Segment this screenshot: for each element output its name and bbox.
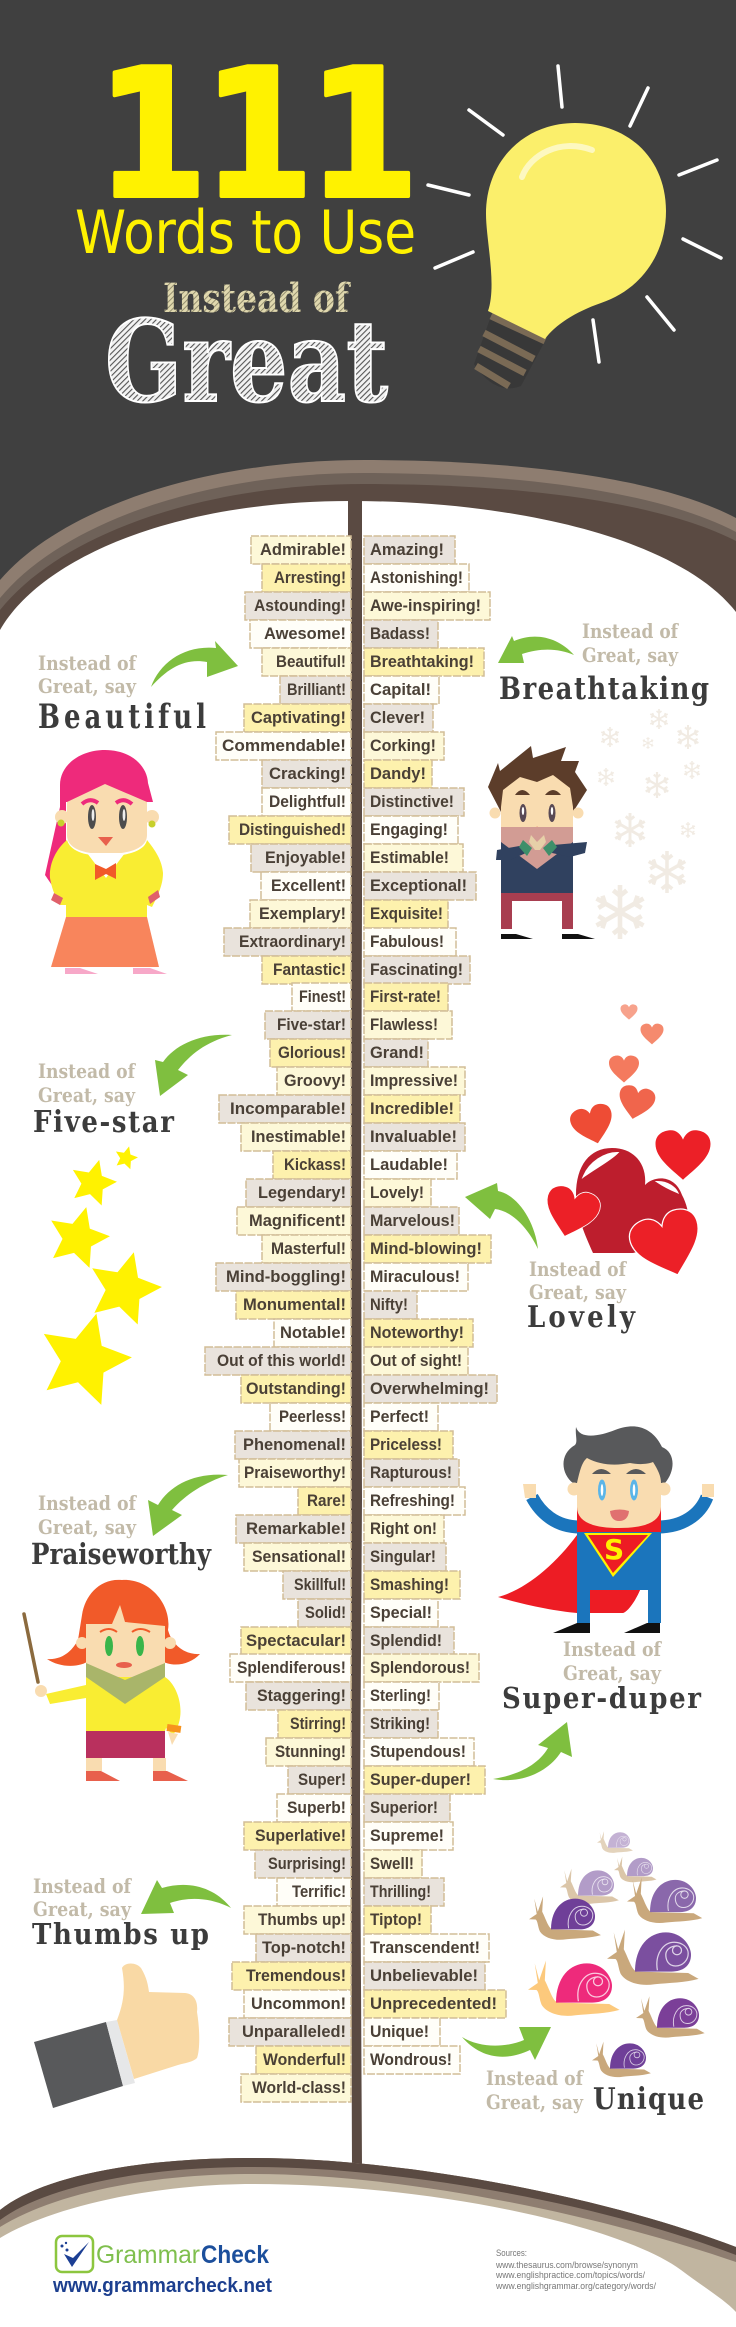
tag: Special: Special!	[370, 1604, 432, 1622]
word column: left	[205, 536, 351, 2102]
title: Great: Great	[105, 297, 388, 428]
tag: Skillful: Skillful!	[294, 1576, 346, 1594]
tag: Flawless: Flawless!	[370, 1016, 438, 1034]
logo: GrammarCheck: www.grammarcheck.net	[52, 2275, 272, 2297]
tag: Tiptop: Tiptop!	[370, 1911, 422, 1929]
tag: First-rate: First-rate!	[370, 988, 441, 1006]
callout: Thumbs up: Thumbs up	[32, 1918, 209, 1951]
tag: Excellent: Excellent!	[271, 877, 346, 895]
tag: Sterling: Sterling!	[370, 1687, 431, 1705]
tag: Stupendous	[364, 1738, 474, 1766]
tag: Estimable: Estimable!	[370, 849, 449, 867]
tag: Phenomenal	[235, 1431, 351, 1459]
tag: Lovely	[364, 1179, 431, 1207]
tag: Thrilling	[364, 1878, 444, 1906]
tag: Wonderful	[256, 2046, 351, 2074]
tag: Surprising: Surprising!	[268, 1855, 346, 1873]
tag: Estimable	[364, 844, 463, 872]
tag: Transcendent	[364, 1934, 489, 1962]
tag: Astonishing: Astonishing!	[370, 569, 463, 587]
tag: Distinguished: Distinguished!	[239, 821, 346, 839]
tag: Super: Super!	[298, 1771, 346, 1789]
tag: Unbelievable	[364, 1962, 485, 1990]
tag: Thrilling: Thrilling!	[370, 1883, 431, 1901]
callout: Breathtaking: Instead of	[582, 620, 679, 643]
tag: Mind-blowing: Mind-blowing!	[370, 1240, 482, 1258]
tag: Awe-inspiring: Awe-inspiring!	[370, 597, 481, 615]
tag: Beautiful	[262, 648, 351, 676]
tag: Out of this world: Out of this world!	[217, 1352, 346, 1370]
tag: Magnificent	[237, 1207, 351, 1235]
tag: Fascinating: Fascinating!	[370, 961, 463, 979]
callout: Super-duper: Super-duper	[502, 1682, 702, 1715]
callout: Super-duper: Instead of	[563, 1638, 662, 1661]
tag: Stunning: Stunning!	[275, 1743, 346, 1761]
tag: Admirable: Admirable!	[260, 541, 346, 559]
tag: Unbelievable: Unbelievable!	[370, 1967, 478, 1985]
logo: GrammarCheck	[52, 2236, 272, 2297]
text block: sources: www.englishgrammar.org/category/words/	[495, 2281, 656, 2292]
tag: Sensational	[244, 1543, 351, 1571]
callout: Praiseworthy: Great, say	[38, 1516, 137, 1539]
icon: snowflakes	[597, 709, 700, 939]
tag: Arresting: Arresting!	[274, 569, 346, 587]
tag: Astounding	[245, 592, 351, 620]
tag: Refreshing: Refreshing!	[370, 1492, 455, 1510]
callout: Thumbs up: Great, say	[33, 1898, 132, 1921]
tag: Peerless: Peerless!	[279, 1408, 346, 1426]
callout: Super-duper	[502, 1638, 702, 1715]
character: girl with pink hair	[45, 750, 167, 974]
tag: Legendary: Legendary!	[258, 1184, 346, 1202]
arrow: Five-star	[155, 1035, 232, 1096]
tag: Legendary	[246, 1179, 351, 1207]
callout: Praiseworthy: Instead of	[38, 1492, 137, 1515]
tag: Impressive	[364, 1067, 465, 1095]
callout: Thumbs up: Instead of	[33, 1875, 132, 1898]
tag: Magnificent: Magnificent!	[249, 1212, 346, 1230]
tag: Nifty: Nifty!	[370, 1296, 408, 1314]
tag: Laudable	[364, 1151, 457, 1179]
tag: Invaluable	[364, 1123, 465, 1151]
callout: Beautiful: Beautiful	[38, 698, 206, 737]
tag: Rapturous	[364, 1459, 459, 1487]
tag: Overwhelming	[364, 1375, 497, 1403]
tag: Lovely: Lovely!	[370, 1184, 424, 1202]
tag: Outstanding	[241, 1375, 351, 1403]
tag: Exquisite	[364, 900, 448, 928]
tag: Smashing	[364, 1571, 460, 1599]
callout: Beautiful: Great, say	[38, 675, 137, 698]
tag: Enjoyable: Enjoyable!	[265, 849, 346, 867]
tag: Singular: Singular!	[370, 1548, 436, 1566]
tag: Uncommon: Uncommon!	[251, 1995, 346, 2013]
tag: Dandy	[364, 760, 432, 788]
tag: Priceless	[364, 1431, 453, 1459]
tag: Staggering: Staggering!	[257, 1687, 346, 1705]
tag: Noteworthy: Noteworthy!	[370, 1324, 464, 1342]
tag: Splendiferous: Splendiferous!	[237, 1659, 346, 1677]
tag: Wonderful: Wonderful!	[263, 2051, 346, 2069]
callout: Lovely: Great, say	[529, 1281, 627, 1304]
callout: Praiseworthy	[31, 1492, 212, 1571]
tag: Unprecedented	[364, 1990, 506, 2018]
tag: Groovy: Groovy!	[284, 1072, 346, 1090]
tag: Admirable	[251, 536, 351, 564]
tag: Flawless	[364, 1011, 452, 1039]
tag: Stunning	[266, 1738, 351, 1766]
callout: Thumbs up	[32, 1875, 209, 1951]
tag: Nifty	[364, 1291, 417, 1319]
tag: Astonishing	[364, 564, 469, 592]
arrow: Unique	[462, 2027, 551, 2060]
tag: Solid	[298, 1599, 351, 1627]
logo: GrammarCheck: Check	[201, 2241, 269, 2269]
tag: Finest	[292, 983, 351, 1011]
tag: Mind-boggling: Mind-boggling!	[226, 1268, 346, 1286]
tag: Arresting	[262, 564, 351, 592]
title: Words to Use: Words to Use	[75, 198, 416, 268]
callout: Five-star: Instead of	[38, 1060, 136, 1083]
tag: Badass	[364, 620, 438, 648]
tag: Phenomenal: Phenomenal!	[243, 1436, 346, 1454]
tag: Priceless: Priceless!	[370, 1436, 442, 1454]
tag: Finest: Finest!	[299, 988, 346, 1006]
tag: Commendable	[216, 732, 351, 760]
tag: Transcendent: Transcendent!	[370, 1939, 480, 1957]
tag: Unparalleled: Unparalleled!	[242, 2023, 346, 2041]
tag: Five-star	[265, 1011, 351, 1039]
tag: Glorious: Glorious!	[278, 1044, 346, 1062]
tag: Out of sight	[364, 1347, 468, 1375]
tag: First-rate	[364, 983, 448, 1011]
tag: Top-notch: Top-notch!	[262, 1939, 346, 1957]
tag: Fascinating	[364, 956, 470, 984]
tag: Rapturous: Rapturous!	[370, 1464, 452, 1482]
tag: Spectacular	[241, 1627, 351, 1655]
tag: Mind-blowing	[364, 1235, 491, 1263]
tag: Superior	[364, 1794, 450, 1822]
tag: Superior: Superior!	[370, 1799, 438, 1817]
tag: Special	[364, 1599, 438, 1627]
tag: Corking: Corking!	[370, 737, 436, 755]
tag: Super	[288, 1766, 351, 1794]
callout: Praiseworthy: Praiseworthy	[31, 1537, 212, 1571]
tag: Superb: Superb!	[287, 1799, 346, 1817]
tag: Unprecedented: Unprecedented!	[370, 1995, 497, 2013]
tag: Swell: Swell!	[370, 1855, 414, 1873]
text block: sources: Sources:	[496, 2248, 527, 2259]
tag: Splendorous	[364, 1654, 479, 1682]
tag: Five-star: Five-star!	[277, 1016, 346, 1034]
tag: Capital: Capital!	[370, 681, 431, 699]
tag: Inestimable: Inestimable!	[251, 1128, 346, 1146]
tag: Thumbs up	[244, 1906, 351, 1934]
tag: Breathtaking	[364, 648, 484, 676]
trunk divider	[348, 490, 362, 2168]
tag: Terrific	[277, 1878, 351, 1906]
tag: Stirring: Stirring!	[290, 1715, 346, 1733]
tag: Super-duper: Super-duper!	[370, 1771, 471, 1789]
tag: Exceptional	[364, 872, 476, 900]
tag: Rare	[298, 1487, 351, 1515]
tag: Right on: Right on!	[370, 1520, 437, 1538]
tag: Excellent	[261, 872, 351, 900]
tag: Notable: Notable!	[280, 1324, 346, 1342]
tag: Supreme: Supreme!	[370, 1827, 444, 1845]
tag: Swell	[364, 1850, 422, 1878]
tag: Unparalleled	[229, 2018, 351, 2046]
tag: Remarkable	[236, 1515, 351, 1543]
tag: Captivating	[244, 704, 351, 732]
title: 111: 111	[96, 31, 419, 238]
tag: Fantastic	[262, 956, 351, 984]
callout: Super-duper: Great, say	[563, 1662, 662, 1685]
tag: Impressive: Impressive!	[370, 1072, 458, 1090]
tag: Incomparable	[219, 1095, 351, 1123]
tag: Clever	[364, 704, 433, 732]
tag: Groovy	[277, 1067, 351, 1095]
tag: Miraculous	[364, 1263, 468, 1291]
tag: Superb	[277, 1794, 351, 1822]
tag: Exemplary	[250, 900, 351, 928]
callout: Unique: Unique	[593, 2081, 704, 2116]
callout: Beautiful	[38, 652, 206, 737]
callout: Lovely: Lovely	[527, 1299, 636, 1334]
panel: bottom ground arc	[0, 2158, 736, 2312]
arrow: Breathtaking	[498, 636, 574, 663]
tag: Masterful: Masterful!	[271, 1240, 346, 1258]
tag: Tiptop	[364, 1906, 431, 1934]
icon: stars	[30, 1143, 169, 1409]
tag: Perfect: Perfect!	[370, 1408, 429, 1426]
tag: Peerless	[270, 1403, 351, 1431]
tag: Noteworthy	[364, 1319, 473, 1347]
tag: Corking	[364, 732, 444, 760]
tag: Fantastic: Fantastic!	[273, 961, 346, 979]
tag: Sensational: Sensational!	[252, 1548, 346, 1566]
tag: Superlative	[244, 1822, 351, 1850]
arrow: Praiseworthy	[148, 1475, 228, 1536]
tag: Monumental: Monumental!	[243, 1296, 346, 1314]
tag: Superlative: Superlative!	[255, 1827, 346, 1845]
tag: Amazing: Amazing!	[370, 541, 444, 559]
tag: Unique	[364, 2018, 440, 2046]
tag: Beautiful: Beautiful!	[276, 653, 346, 671]
panel: white content area	[0, 501, 736, 2327]
tag: Tremendous	[232, 1962, 351, 1990]
tag: Splendid: Splendid!	[370, 1632, 442, 1650]
tag: Top-notch	[256, 1934, 351, 1962]
tag: Splendid	[364, 1627, 454, 1655]
tag: Engaging: Engaging!	[370, 821, 448, 839]
tag: Outstanding: Outstanding!	[246, 1380, 346, 1398]
tag: Fabulous: Fabulous!	[370, 933, 444, 951]
callout: Lovely: Instead of	[529, 1258, 627, 1281]
logo: GrammarCheck: Grammar	[96, 2241, 200, 2269]
icon: hearts	[539, 1004, 711, 1286]
tag: Cracking	[262, 760, 351, 788]
tag: Praiseworthy: Praiseworthy!	[244, 1464, 346, 1482]
arrow: Thumbs up	[141, 1880, 231, 1914]
tag: Laudable: Laudable!	[370, 1156, 448, 1174]
tag: Delightful	[262, 788, 351, 816]
tag: Inestimable	[241, 1123, 351, 1151]
tag: Spectacular: Spectacular!	[246, 1632, 346, 1650]
tag: Grand	[364, 1039, 428, 1067]
tag: Skillful	[283, 1571, 351, 1599]
tag: Brilliant: Brilliant!	[287, 681, 346, 699]
tag: Astounding: Astounding!	[254, 597, 346, 615]
tag: Notable	[274, 1319, 351, 1347]
tag: Grand: Grand!	[370, 1044, 424, 1062]
tag: Staggering	[246, 1682, 351, 1710]
tag: Out of this world	[205, 1347, 351, 1375]
text block: sources: www.englishpractice.com/topics/words/	[495, 2270, 645, 2281]
tag: Awe-inspiring	[364, 592, 490, 620]
tag: Distinctive: Distinctive!	[370, 793, 454, 811]
tag: Stirring	[278, 1710, 351, 1738]
tag: Striking	[364, 1710, 438, 1738]
tag: Surprising	[255, 1850, 351, 1878]
tag: Striking: Striking!	[370, 1715, 430, 1733]
callout: Unique: Great, say	[486, 2091, 584, 2114]
tag: Unique: Unique!	[370, 2023, 429, 2041]
callout: Breathtaking: Great, say	[582, 644, 679, 667]
tag: Invaluable: Invaluable!	[370, 1128, 457, 1146]
tag: Engaging	[364, 816, 458, 844]
tag: Stupendous: Stupendous!	[370, 1743, 466, 1761]
tag: Awesome: Awesome!	[264, 625, 346, 643]
tag: Capital	[364, 676, 439, 704]
character: teacher with pointer	[24, 1580, 200, 1781]
callout: Unique	[486, 2067, 704, 2116]
character: superhero	[498, 1426, 714, 1633]
tag: Dandy: Dandy!	[370, 765, 426, 783]
arrow: Super-duper	[493, 1722, 572, 1780]
panel: arch top band	[0, 460, 736, 700]
tag: Cracking: Cracking!	[269, 765, 346, 783]
tag: Tremendous: Tremendous!	[246, 1967, 346, 1985]
tag: Singular	[364, 1543, 446, 1571]
tag: Clever: Clever!	[370, 709, 425, 727]
tag: Marvelous	[364, 1207, 459, 1235]
icon: snails	[528, 1831, 705, 2077]
tag: Uncommon	[244, 1990, 351, 2018]
tag: Amazing	[364, 536, 455, 564]
tag: Overwhelming: Overwhelming!	[370, 1380, 489, 1398]
callout: Unique: Instead of	[486, 2067, 584, 2090]
arrow: Lovely	[465, 1183, 538, 1249]
tag: Brilliant	[280, 676, 351, 704]
tag: Extraordinary: Extraordinary!	[239, 933, 346, 951]
tag: Captivating: Captivating!	[251, 709, 346, 727]
tag: Incredible: Incredible!	[370, 1100, 454, 1118]
tag: Remarkable: Remarkable!	[246, 1520, 346, 1538]
tag: Distinctive	[364, 788, 464, 816]
tag: Monumental	[236, 1291, 351, 1319]
tag: Exemplary: Exemplary!	[259, 905, 346, 923]
tag: Right on	[364, 1515, 444, 1543]
tag: Mind-boggling	[216, 1263, 351, 1291]
tag: Fabulous	[364, 928, 456, 956]
tag: Sterling	[364, 1682, 439, 1710]
character: shivering boy	[488, 746, 595, 939]
tag: Exquisite: Exquisite!	[370, 905, 443, 923]
tag: Badass: Badass!	[370, 625, 430, 643]
arrow: Beautiful	[151, 641, 238, 687]
callout: Five-star: Great, say	[38, 1084, 136, 1107]
tag: Wondrous: Wondrous!	[370, 2051, 452, 2069]
tag: Splendiferous	[230, 1654, 351, 1682]
text block: sources: www.thesaurus.com/browse/synonym	[495, 2260, 638, 2271]
tag: Distinguished	[229, 816, 351, 844]
tag: Exceptional: Exceptional!	[370, 877, 467, 895]
word column: right	[364, 536, 506, 2074]
tag: Rare: Rare!	[307, 1492, 346, 1510]
tag: Breathtaking: Breathtaking!	[370, 653, 474, 671]
tag: Smashing: Smashing!	[370, 1576, 449, 1594]
tag: Glorious	[270, 1039, 351, 1067]
tag: Super-duper	[364, 1766, 485, 1794]
tag: Kickass: Kickass!	[284, 1156, 346, 1174]
text block: sources	[495, 2248, 656, 2292]
tag: Incomparable: Incomparable!	[230, 1100, 346, 1118]
callout: Beautiful: Instead of	[38, 652, 137, 675]
tag: Terrific: Terrific!	[292, 1883, 346, 1901]
callout: Lovely	[527, 1258, 636, 1334]
tag: Incredible	[364, 1095, 460, 1123]
tag: Extraordinary	[224, 928, 351, 956]
tag: Praiseworthy	[239, 1459, 351, 1487]
callout: Breathtaking	[499, 620, 709, 707]
tag: Delightful: Delightful!	[269, 793, 346, 811]
tag: Solid: Solid!	[305, 1604, 346, 1622]
tag: Wondrous	[364, 2046, 460, 2074]
tag: World-class: World-class!	[252, 2079, 346, 2097]
tag: Splendorous: Splendorous!	[370, 1659, 470, 1677]
tag: Miraculous: Miraculous!	[370, 1268, 460, 1286]
title: Instead of: Instead of	[163, 275, 351, 322]
callout: Five-star: Five-star	[33, 1104, 175, 1139]
tag: Enjoyable	[251, 844, 351, 872]
icon: thumbs up hand	[34, 1964, 199, 2108]
icon: light bulb	[428, 66, 721, 388]
callout: Breathtaking: Breathtaking	[499, 670, 709, 707]
tag: World-class	[241, 2074, 351, 2102]
tag: Thumbs up: Thumbs up!	[258, 1911, 346, 1929]
tag: Supreme	[364, 1822, 453, 1850]
tag: Perfect	[364, 1403, 438, 1431]
callout: Five-star	[33, 1060, 175, 1139]
tag: Refreshing	[364, 1487, 465, 1515]
tag: Marvelous: Marvelous!	[370, 1212, 455, 1230]
character: superhero: S	[604, 1533, 624, 1566]
tag: Kickass	[273, 1151, 351, 1179]
tag: Awesome	[250, 620, 351, 648]
tag: Out of sight: Out of sight!	[370, 1352, 462, 1370]
tag: Masterful	[262, 1235, 351, 1263]
tag: Commendable: Commendable!	[222, 737, 346, 755]
